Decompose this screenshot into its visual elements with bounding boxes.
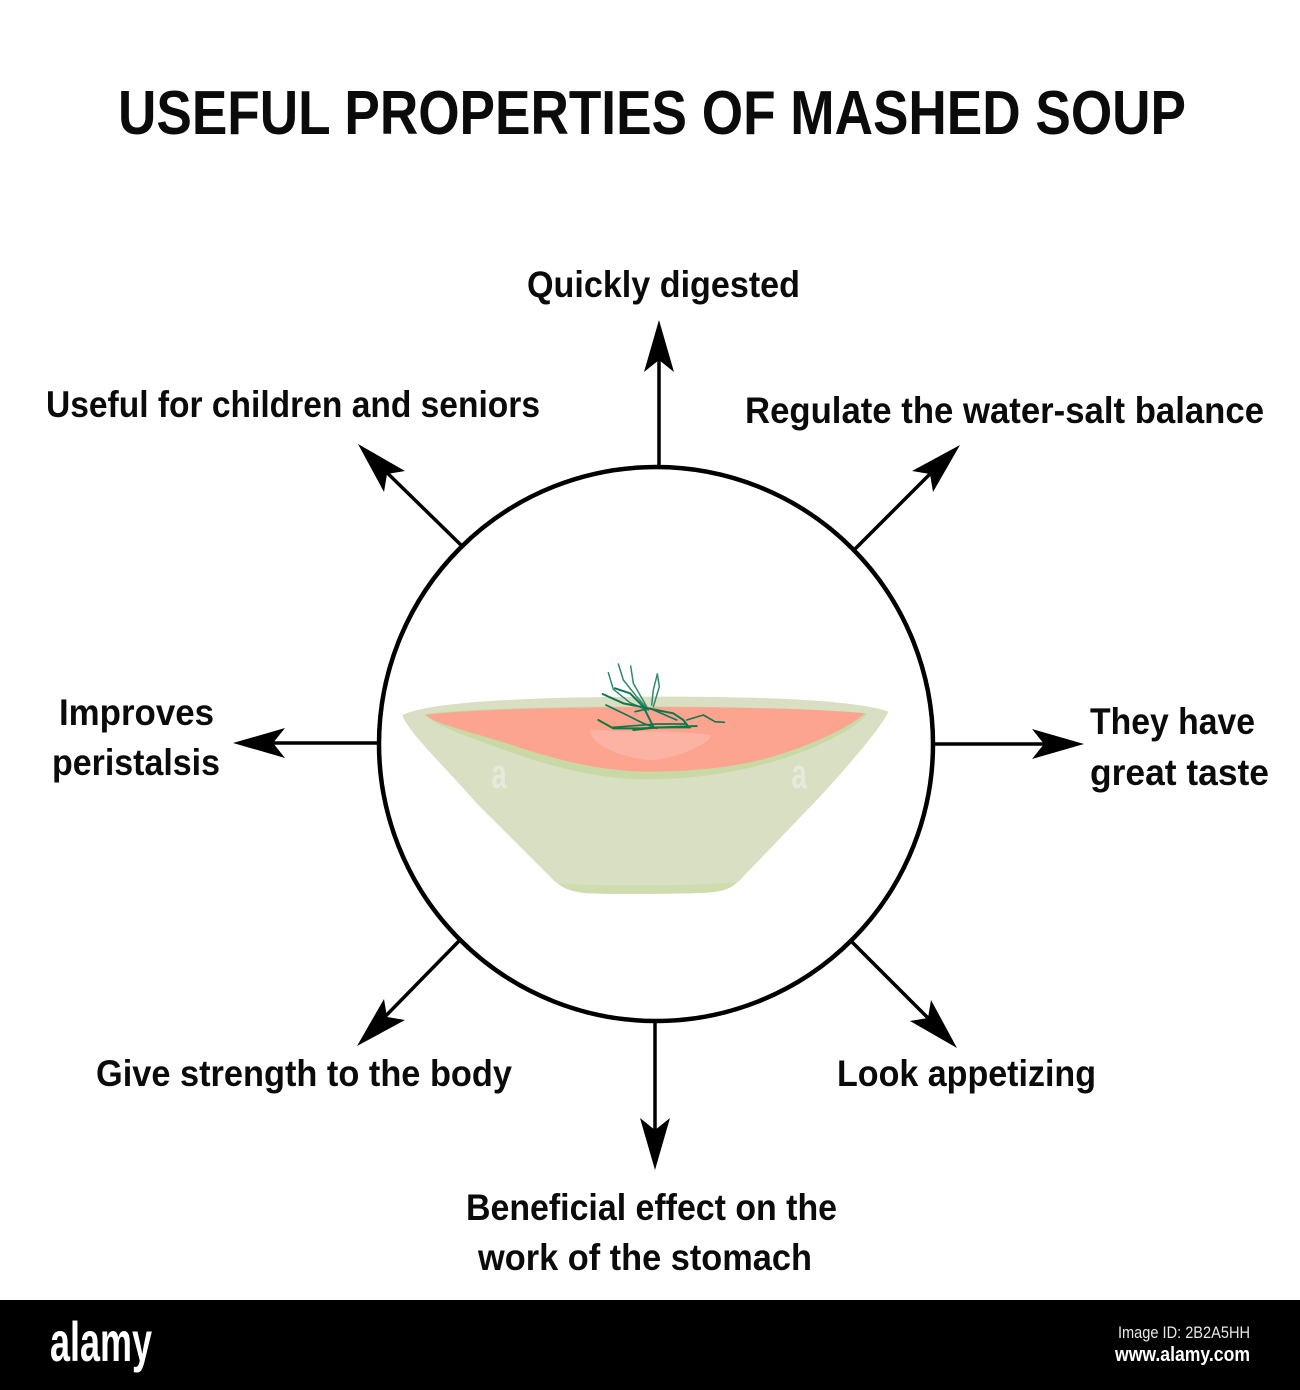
footer bar [0, 1300, 1300, 1390]
label: improves peristalsis [52, 692, 220, 783]
label: they have great taste: They have [1090, 701, 1255, 742]
label: look appetizing: Look appetizing [837, 1053, 1096, 1094]
arrow: bottom right [852, 942, 957, 1048]
bowl inner rim [425, 707, 867, 779]
watermark letters on bowl: a [491, 750, 507, 797]
label: improves peristalsis: peristalsis [52, 742, 220, 783]
bowl body [402, 697, 888, 894]
footer logo: alamy [50, 1310, 152, 1373]
arrow: top [644, 320, 674, 467]
label: beneficial effect on the work of the stomach: work of the stomach [477, 1237, 812, 1278]
footer image id: Image ID: 2B2A5HH [1118, 1323, 1250, 1342]
label: improves peristalsis: Improves [59, 692, 214, 733]
arrow: right [933, 729, 1084, 759]
soup surface [426, 707, 865, 772]
label: quickly digested: Quickly digested [527, 264, 800, 305]
label: beneficial effect on the work of the stomach: Beneficial effect on the [466, 1187, 837, 1228]
arrow: top right [854, 445, 960, 550]
arrow: top left [358, 444, 462, 546]
arrow: bottom left [357, 941, 459, 1046]
footer website: www.alamy.com [1114, 1344, 1250, 1366]
icon: dill sprig [598, 664, 724, 730]
label: regulate water-salt balance: Regulate the water-salt balance [745, 390, 1264, 431]
label: they have great taste: great taste [1090, 752, 1269, 793]
label: beneficial effect on the work of the stomach [466, 1187, 837, 1278]
arrow: bottom [640, 1022, 670, 1170]
label: useful for children and seniors: Useful for children and seniors [46, 384, 540, 425]
arrow: left [233, 728, 379, 758]
central circle [379, 467, 933, 1021]
icon: soup bowl: a [791, 750, 807, 797]
label: give strength to the body: Give strength to the body [96, 1053, 512, 1094]
icon: soup bowl [402, 664, 888, 894]
soup highlight [590, 729, 710, 760]
bowl base highlight [558, 882, 737, 894]
label: they have great taste [1090, 701, 1269, 793]
